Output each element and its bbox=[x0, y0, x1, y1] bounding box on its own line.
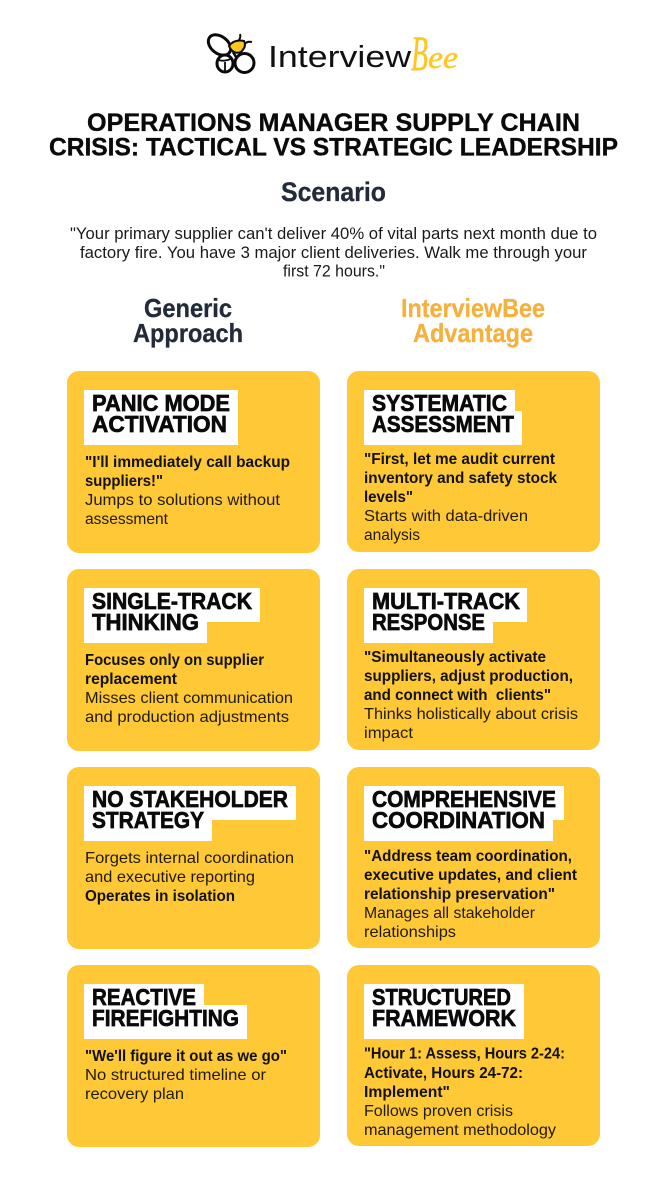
text: multi-track body: suppliers, adjust production, bbox=[364, 668, 573, 685]
text: reactive body: recovery plan bbox=[85, 1086, 184, 1103]
column heading: InterviewBee advantage: Advantage bbox=[413, 318, 533, 348]
text: single-track body: Focuses only on supplier bbox=[85, 652, 264, 669]
text: single-track body: Misses client communication bbox=[85, 690, 293, 707]
logo script accent: ee bbox=[428, 39, 458, 75]
title: OPERATIONS MANAGER SUPPLY CHAIN bbox=[87, 109, 580, 137]
text: structured body: management methodology bbox=[364, 1122, 556, 1139]
text: panic mode body: assessment bbox=[85, 511, 169, 528]
logo wordmark: Interview bbox=[268, 39, 412, 74]
heading: reactive firefighting bbox=[84, 984, 247, 1039]
text: panic mode body: Jumps to solutions without bbox=[85, 492, 281, 509]
panel: structured framework bbox=[347, 965, 600, 1146]
text: systematic body: levels" bbox=[364, 489, 413, 506]
logo: InterviewBee bbox=[204, 25, 458, 81]
text: systematic body: inventory and safety stock bbox=[364, 470, 557, 487]
heading: panic mode activation: PANIC MODE bbox=[92, 390, 230, 416]
text: structured body: "Hour 1: Assess, Hours 2-24: bbox=[364, 1046, 565, 1062]
heading: no stakeholder strategy bbox=[84, 786, 296, 841]
text: structured body bbox=[364, 1046, 565, 1139]
panel: reactive firefighting bbox=[67, 965, 320, 1147]
heading: no stakeholder strategy: NO STAKEHOLDER bbox=[92, 786, 288, 812]
panel: systematic assessment bbox=[347, 371, 600, 552]
text: comprehensive body: relationships bbox=[364, 924, 456, 941]
text: multi-track body: impact bbox=[364, 725, 414, 742]
heading: multi-track response: RESPONSE bbox=[372, 609, 485, 635]
heading: panic mode activation: ACTIVATION bbox=[92, 411, 227, 437]
scenario quote: factory fire. You have 3 major client deliveries. Walk me through your bbox=[80, 244, 588, 262]
text: comprehensive body: "Address team coordination, bbox=[364, 848, 572, 865]
text: no stakeholder body: and executive reporting bbox=[85, 869, 255, 886]
column heading: InterviewBee advantage: InterviewBee bbox=[401, 293, 545, 323]
heading: multi-track response: MULTI-TRACK bbox=[372, 588, 520, 614]
heading: systematic assessment: ASSESSMENT bbox=[372, 411, 515, 437]
panel: panic mode activation bbox=[67, 371, 320, 553]
text: no stakeholder body: Forgets internal coordination bbox=[85, 850, 294, 867]
logo script accent: B bbox=[411, 25, 428, 81]
heading: comprehensive coordination: COORDINATION bbox=[372, 807, 545, 833]
text: no stakeholder body: Operates in isolation bbox=[85, 888, 235, 905]
heading: systematic assessment bbox=[364, 390, 522, 445]
text: multi-track body: and connect with clients" bbox=[364, 687, 551, 704]
heading: multi-track response bbox=[364, 588, 527, 643]
panel: no stakeholder strategy bbox=[67, 767, 320, 949]
text: comprehensive body: executive updates, and client bbox=[364, 867, 578, 884]
text: comprehensive body bbox=[364, 848, 578, 941]
text: systematic body: analysis bbox=[364, 527, 420, 544]
heading: structured framework: STRUCTURED bbox=[372, 984, 511, 1010]
text: panic mode body bbox=[85, 454, 290, 528]
column heading: generic approach bbox=[133, 293, 243, 348]
heading: single-track thinking: SINGLE-TRACK bbox=[92, 588, 252, 614]
text: multi-track body: Thinks holistically about crisis bbox=[364, 706, 578, 723]
title: CRISIS: TACTICAL VS STRATEGIC LEADERSHIP bbox=[49, 134, 618, 162]
text: panic mode body: suppliers!" bbox=[85, 473, 163, 490]
text: panic mode body: "I'll immediately call backup bbox=[85, 454, 290, 471]
scenario quote bbox=[70, 225, 597, 280]
heading: structured framework bbox=[364, 984, 524, 1039]
text: systematic body bbox=[364, 451, 557, 544]
panel: comprehensive coordination bbox=[347, 767, 600, 948]
heading: comprehensive coordination: COMPREHENSIVE bbox=[372, 786, 556, 812]
heading: single-track thinking bbox=[84, 588, 260, 643]
column heading: generic approach: Approach bbox=[133, 318, 243, 348]
text: single-track body bbox=[85, 652, 293, 726]
panel: multi-track response bbox=[347, 569, 600, 750]
text: structured body: Implement" bbox=[364, 1084, 450, 1101]
text: structured body: Follows proven crisis bbox=[364, 1103, 513, 1120]
heading: reactive firefighting: REACTIVE bbox=[92, 984, 196, 1010]
heading: scenario: Scenario bbox=[281, 177, 386, 207]
heading: single-track thinking: THINKING bbox=[92, 609, 199, 635]
text: comprehensive body: Manages all stakeholder bbox=[364, 905, 536, 922]
heading: no stakeholder strategy: STRATEGY bbox=[92, 807, 204, 833]
title bbox=[49, 109, 618, 162]
text: reactive body: "We'll figure it out as we go" bbox=[85, 1048, 287, 1065]
text: structured body: Activate, Hours 24-72: bbox=[364, 1065, 523, 1082]
heading: comprehensive coordination bbox=[364, 786, 564, 841]
scenario quote: "Your primary supplier can't deliver 40% of vital parts next month due to bbox=[70, 225, 597, 243]
panel: single-track thinking bbox=[67, 569, 320, 751]
heading: systematic assessment: SYSTEMATIC bbox=[372, 390, 507, 416]
text: no stakeholder body bbox=[85, 850, 294, 905]
heading: reactive firefighting: FIREFIGHTING bbox=[92, 1005, 239, 1031]
text: systematic body: Starts with data-driven bbox=[364, 508, 528, 525]
column heading: generic approach: Generic bbox=[144, 293, 232, 323]
text: reactive body: No structured timeline or bbox=[85, 1067, 267, 1084]
scenario quote: first 72 hours." bbox=[283, 262, 385, 280]
text: comprehensive body: relationship preservation" bbox=[364, 886, 555, 903]
text: single-track body: replacement bbox=[85, 671, 178, 688]
icon: bee bbox=[204, 31, 254, 72]
text: single-track body: and production adjustments bbox=[85, 709, 289, 726]
text: systematic body: "First, let me audit current bbox=[364, 451, 556, 468]
heading: structured framework: FRAMEWORK bbox=[372, 1005, 516, 1031]
column heading: InterviewBee advantage bbox=[401, 293, 545, 348]
text: reactive body bbox=[85, 1048, 287, 1103]
text: multi-track body bbox=[364, 649, 578, 742]
heading: panic mode activation bbox=[84, 390, 238, 445]
text: multi-track body: "Simultaneously activate bbox=[364, 649, 546, 666]
